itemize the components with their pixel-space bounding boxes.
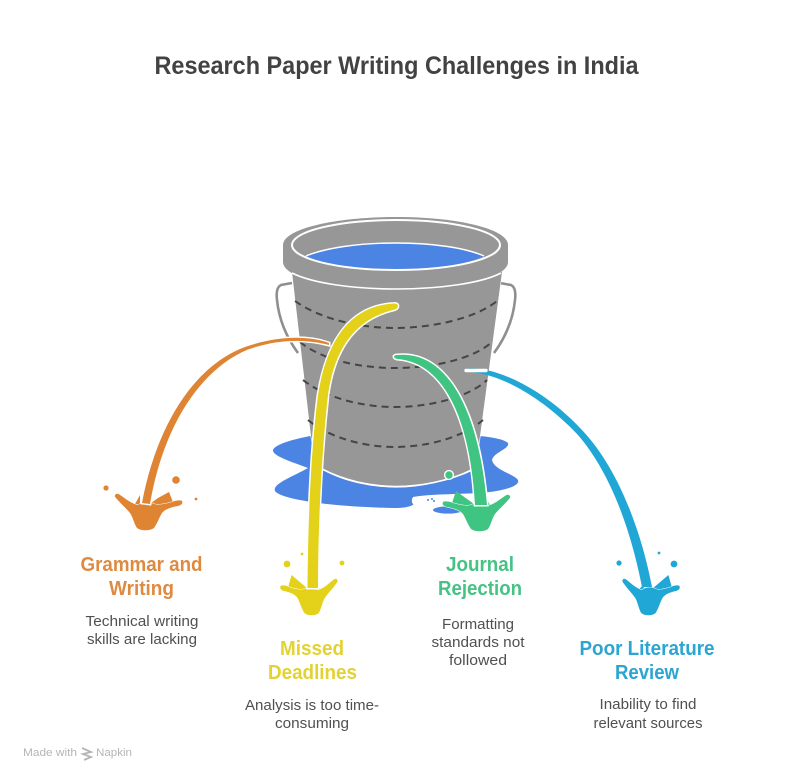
heading line 2: poor literature review: Review [615, 662, 679, 684]
blue stream [468, 368, 652, 587]
heading: missed deadlines: Missed [280, 638, 344, 660]
description: missed deadlines: Analysis is too time- [245, 697, 379, 714]
description line 2: journal rejection: standards not [432, 634, 525, 651]
yellow stream [308, 303, 398, 588]
puddle [273, 436, 518, 508]
orange splash [115, 492, 182, 530]
green droplet [445, 471, 453, 479]
heading: grammar and writing: Grammar and [80, 554, 202, 576]
item: poor literature review [466, 368, 680, 615]
rim lower highlight [292, 273, 501, 289]
water surface highlight [306, 243, 484, 256]
description: poor literature review: Inability to find [600, 696, 696, 713]
bucket handle left [277, 283, 298, 353]
yellow droplets [284, 553, 344, 567]
orange stream [142, 338, 329, 504]
rim inner ellipse [292, 220, 500, 270]
heading line 2: grammar and writing: Writing [109, 578, 174, 600]
description: journal rejection: Formatting [442, 616, 514, 633]
footer: made with napkin: Made with [23, 747, 77, 759]
heading line 2: missed deadlines: Deadlines [268, 662, 357, 684]
water in bucket [306, 243, 484, 269]
item: grammar and writing [103, 338, 329, 530]
small puddle specks [427, 498, 435, 502]
item: missed deadlines [280, 303, 398, 615]
blue droplets [616, 552, 677, 567]
description line 2: grammar and writing: skills are lacking [87, 631, 197, 648]
heading: journal rejection: Journal [446, 554, 514, 576]
heading: poor literature review: Poor Literature [580, 638, 714, 660]
stitched dashed seams [295, 301, 497, 447]
orange droplets [103, 476, 197, 500]
description line 3: journal rejection: followed [449, 652, 507, 669]
bucket base edge [322, 469, 474, 486]
blue stream start highlight [466, 369, 486, 372]
title: Research Paper Writing Challenges in India [154, 52, 640, 80]
small puddle drop [433, 506, 463, 514]
description line 2: missed deadlines: consuming [275, 715, 349, 732]
bucket rim [283, 217, 508, 290]
bucket body [292, 272, 502, 487]
description line 2: poor literature review: relevant sources [594, 715, 702, 732]
white patch behind green splash [412, 494, 490, 515]
description: grammar and writing: Technical writing [86, 613, 198, 630]
green splash [443, 491, 510, 531]
heading line 2: journal rejection: Rejection [438, 578, 522, 600]
green stream [394, 355, 487, 505]
bucket handle right [494, 283, 515, 353]
illustration: leaking bucket [273, 217, 518, 508]
blue splash [622, 575, 680, 615]
footer: made with napkin: Napkin [96, 747, 132, 759]
item: journal rejection [394, 355, 510, 531]
footer: made with napkin [23, 747, 132, 760]
icon: napkin mark [82, 748, 91, 760]
yellow splash [280, 575, 338, 615]
